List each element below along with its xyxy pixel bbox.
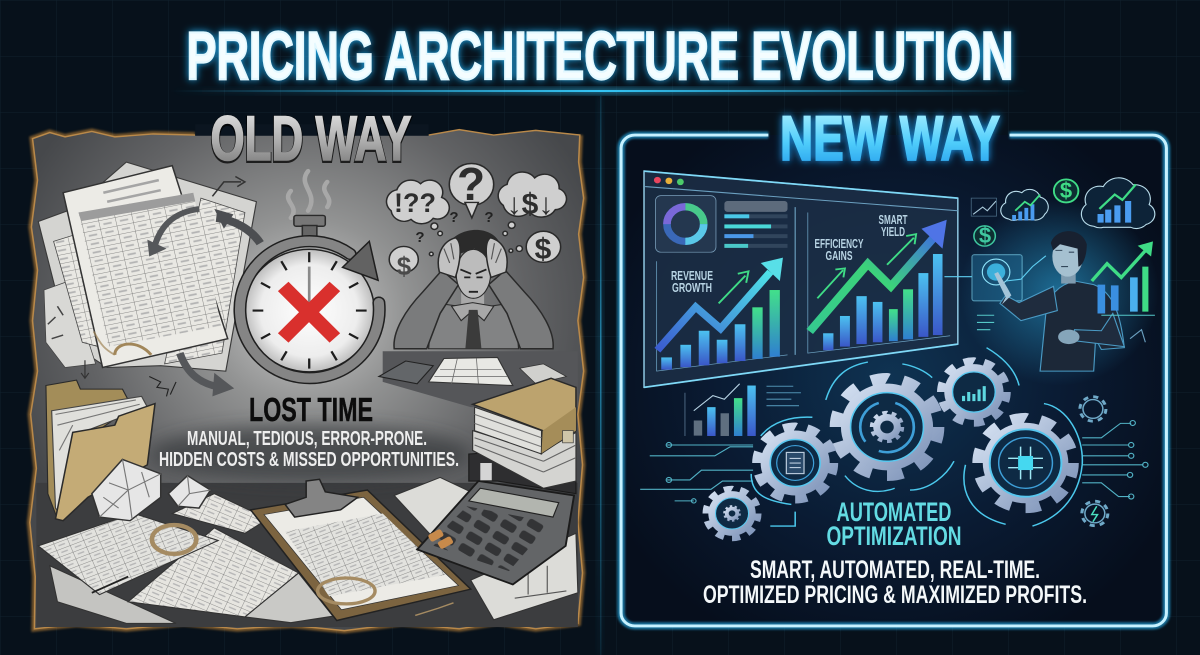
- chart labels: GROWTH: [672, 280, 712, 295]
- bubble symbols: ↓$↓: [507, 188, 553, 221]
- dashboard window: [644, 171, 958, 387]
- dollar symbols: $: [979, 223, 991, 248]
- bubble symbols: !??: [394, 188, 436, 218]
- binders stack: [469, 378, 576, 494]
- panel: old way: [30, 104, 584, 631]
- orbit arrows: [751, 348, 1082, 526]
- man at holographic screen: [944, 231, 1124, 371]
- donut widget: [655, 196, 716, 252]
- automated optimization heading: [826, 497, 962, 551]
- chart labels: REVENUE: [671, 268, 713, 283]
- centre divider: [597, 96, 603, 655]
- neon frame: [621, 135, 1166, 626]
- automated optimization heading: AUTOMATED: [836, 497, 952, 527]
- gear: small: [707, 490, 757, 537]
- title underline: [170, 88, 1030, 94]
- gear: centre: [838, 381, 936, 473]
- new way description: [703, 556, 1087, 609]
- dollar symbols: [979, 178, 1072, 248]
- gear: document: [758, 428, 832, 498]
- calculator: [417, 481, 574, 584]
- mini bar chart: [685, 384, 801, 436]
- stopwatch with red x: [240, 171, 379, 378]
- old way description: HIDDEN COSTS & MISSED OPPORTUNITIES.: [159, 449, 459, 471]
- heading: old way: [210, 104, 412, 175]
- lost time heading: LOST TIME: [249, 391, 373, 428]
- cloud and dollar icons: [971, 178, 1155, 342]
- stressed man with thought bubbles: [386, 164, 566, 349]
- bubble symbols: ?: [457, 158, 485, 210]
- circuit traces: [640, 420, 1148, 503]
- automated optimization heading: OPTIMIZATION: [826, 521, 962, 551]
- gears cluster: [640, 348, 1148, 537]
- heading: new way: NEW WAY: [780, 104, 1000, 174]
- small outline gear icons: [1080, 397, 1108, 526]
- torn paper background: [30, 124, 584, 631]
- chart labels: GAINS: [826, 248, 853, 263]
- manila folder: [46, 380, 155, 521]
- bubble symbols: $: [535, 233, 552, 266]
- desk items behind: [379, 357, 566, 386]
- heading: new way: NEW WAY: [780, 104, 1000, 174]
- panel: new way: [621, 104, 1166, 626]
- chart labels: SMART: [878, 212, 908, 227]
- dollar symbols: $: [1060, 178, 1072, 203]
- old way description: MANUAL, TEDIOUS, ERROR-PRONE.: [187, 428, 427, 450]
- bubble symbols: ?: [449, 209, 459, 226]
- bubble symbols: ?: [484, 209, 494, 226]
- heading: old way: OLD WAY: [210, 104, 412, 174]
- heading: old way: OLD WAY: [210, 105, 412, 175]
- gear: chip: [980, 420, 1071, 506]
- bubble symbols: ?: [415, 229, 425, 246]
- bottom desk papers and clipboard: [38, 459, 578, 623]
- chart labels: YIELD: [881, 224, 905, 239]
- widget bars: [724, 201, 788, 248]
- chart labels: EFFICIENCY: [814, 236, 864, 251]
- chart: efficiency gains: [808, 213, 950, 353]
- new way description: SMART, AUTOMATED, REAL-TIME.: [750, 556, 1040, 584]
- chart labels: [671, 212, 908, 295]
- chart: revenue growth: [657, 258, 788, 371]
- bubble symbols: $: [397, 251, 412, 281]
- bubble symbols: [394, 158, 553, 281]
- spreadsheet stack with arrows: [38, 162, 260, 396]
- old way description: [159, 428, 459, 471]
- gear: top right: [942, 362, 1006, 422]
